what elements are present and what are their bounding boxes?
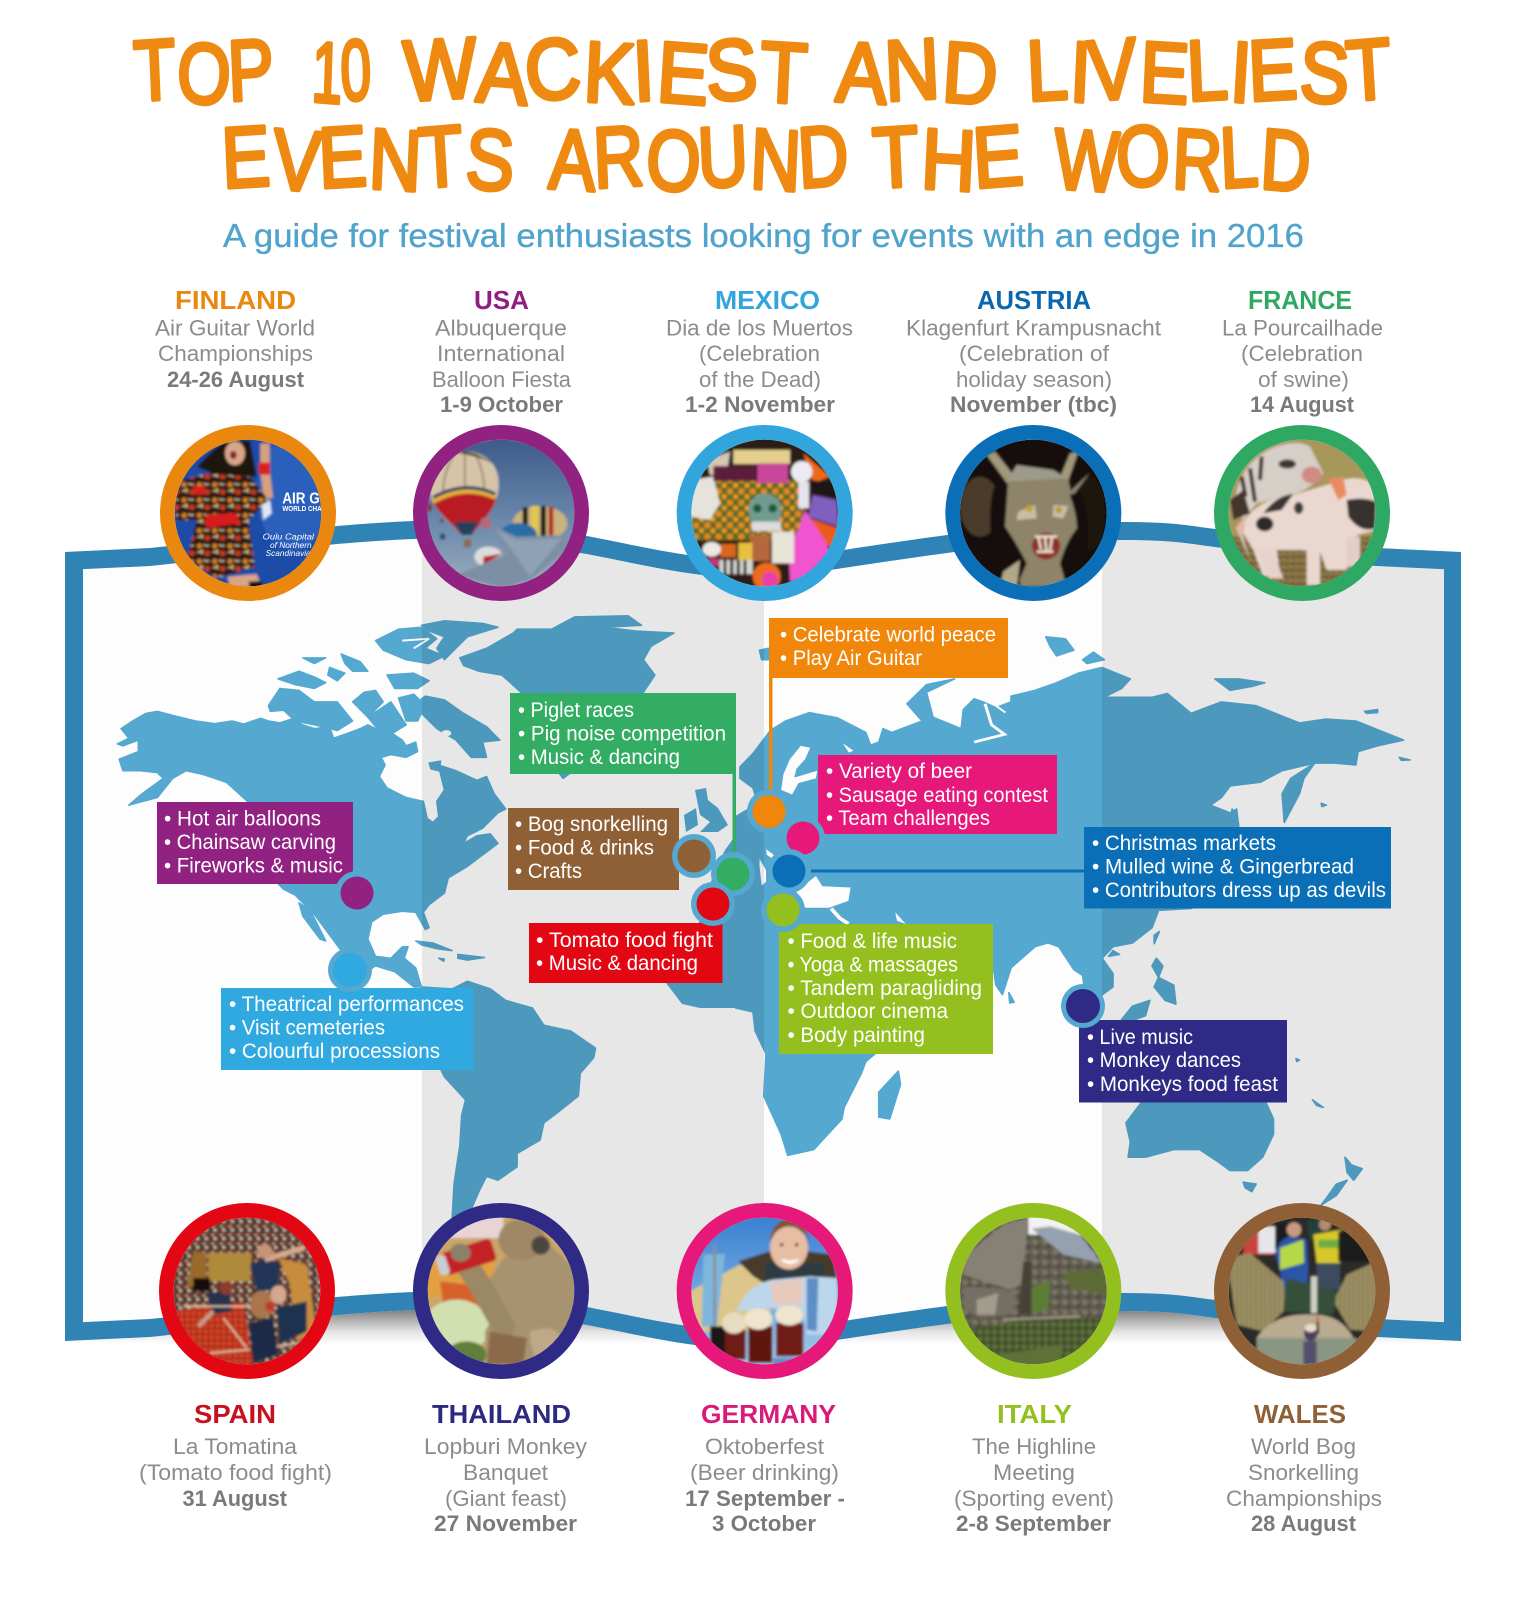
event info: Spain: La Tomatina <box>173 1434 298 1459</box>
event info: Finland <box>155 285 315 392</box>
callout: USA activities: • Chainsaw carving <box>164 831 336 854</box>
event info: Mexico: MEXICO <box>715 285 820 315</box>
callout: Italy activities <box>779 924 993 1054</box>
callout: Italy activities: • Yoga & massages <box>788 954 958 976</box>
event info: Finland: Championships <box>158 341 313 366</box>
event info: Austria: AUSTRIA <box>977 285 1091 315</box>
event info: Thailand: Banquet <box>463 1460 548 1485</box>
photo circle: France piglets <box>1221 432 1383 594</box>
event info: Italy: (Sporting event) <box>954 1486 1114 1511</box>
photo circle: Finland air guitar: WORLD CHA <box>282 504 322 513</box>
photo circle: Mexico altar <box>684 432 845 594</box>
callout: Mexico activities <box>221 988 474 1070</box>
callout: Austria activities <box>805 827 1391 908</box>
map marker: Italy <box>761 888 805 932</box>
event info: Wales: Championships <box>1226 1486 1382 1511</box>
title: WACKIEST <box>401 20 810 124</box>
callout: Italy activities: • Tandem paragliding <box>788 977 982 1000</box>
title: EVENTS <box>219 108 517 210</box>
event info: Austria: (Celebration of <box>959 341 1110 366</box>
event info: Thailand: Lopburi Monkey <box>424 1434 587 1459</box>
photo circle: Finland air guitar <box>167 432 330 594</box>
map marker: France <box>711 852 755 896</box>
photo circle: Austria Krampus mask <box>953 432 1114 594</box>
event info: Germany: GERMANY <box>701 1399 836 1429</box>
event info: USA: USA <box>474 285 529 315</box>
event info: Mexico: (Celebration <box>699 341 820 366</box>
event info: France <box>1222 285 1383 417</box>
grey fold panels <box>422 500 1444 1350</box>
event info: Wales <box>1226 1399 1382 1536</box>
title: TOP <box>131 22 276 124</box>
event info: France: of swine) <box>1258 367 1349 392</box>
map frame: bottom wavy band <box>65 1292 1461 1349</box>
folded map paper <box>116 540 1444 1326</box>
photo circle: Finland air guitar: AIR G <box>282 490 320 507</box>
callout: Italy activities: • Body painting <box>788 1024 925 1047</box>
subtitle: A guide for festival enthusiasts looking for events with an edge in 2016 <box>223 218 1304 255</box>
map frame: top wavy band <box>65 521 1461 578</box>
event info: USA: 1-9 October <box>440 392 563 417</box>
callout: Germany activities: • Team challenges <box>826 807 990 830</box>
photo circle: Wales bog snorkelling <box>1221 1210 1383 1372</box>
event info: Italy: 2-8 September <box>956 1511 1111 1536</box>
event info: Germany: Oktoberfest <box>705 1434 824 1459</box>
event info: Thailand <box>424 1399 587 1536</box>
event info: France: La Pourcailhade <box>1222 316 1383 340</box>
map marker: Mexico <box>328 948 372 992</box>
callout: Thailand activities: • Monkey dances <box>1087 1049 1241 1072</box>
event info: Spain <box>139 1399 332 1511</box>
event info: Spain: (Tomato food fight) <box>139 1460 332 1485</box>
event info: Wales: World Bog <box>1251 1434 1356 1459</box>
map marker: Finland <box>747 790 791 834</box>
event info: Austria: Klagenfurt Krampusnacht <box>906 316 1161 340</box>
event info: Italy <box>954 1399 1114 1536</box>
callout: USA activities: • Fireworks & music <box>164 854 343 878</box>
title: AROUND <box>547 108 851 211</box>
event info: Mexico: Dia de los Muertos <box>666 316 853 340</box>
map frame: right edge <box>1444 552 1461 1340</box>
callout: Finland activities: • Celebrate world peace <box>780 624 996 646</box>
event info: Germany <box>685 1399 845 1536</box>
event info: Austria: November (tbc) <box>950 392 1117 417</box>
event info: USA: Balloon Fiesta <box>432 367 572 392</box>
event info: Germany: 17 September - <box>685 1486 845 1511</box>
map marker: USA <box>335 871 379 915</box>
callout: Mexico activities: • Theatrical performances <box>229 993 464 1016</box>
map frame: left edge <box>65 552 83 1340</box>
callout: USA activities <box>157 802 353 884</box>
event info: Wales: Snorkelling <box>1248 1460 1359 1485</box>
callout: Spain activities: • Tomato food fight <box>536 929 713 952</box>
event info: Thailand: 27 November <box>434 1511 577 1536</box>
callout: Germany activities: • Variety of beer <box>826 760 972 783</box>
event info: Germany: 3 October <box>712 1511 816 1536</box>
event info: Finland: FINLAND <box>175 285 296 315</box>
callout: France activities: • Piglet races <box>518 699 634 722</box>
event info: Mexico: of the Dead) <box>699 367 821 392</box>
title: AND <box>834 21 1001 124</box>
event info: Austria: holiday season) <box>956 367 1112 392</box>
map marker: Thailand <box>1061 984 1105 1028</box>
event info: Mexico: 1-2 November <box>685 392 835 417</box>
map marker: Austria <box>767 849 811 893</box>
callout: Spain activities: • Music & dancing <box>536 952 698 975</box>
callout: France activities: • Pig noise competition <box>518 722 726 746</box>
callout: Germany activities <box>818 755 1057 834</box>
callout: Thailand activities: • Monkeys food feast <box>1087 1073 1278 1096</box>
callout: Wales activities: • Crafts <box>515 860 582 883</box>
photo circle: Spain tomato fight <box>166 1210 328 1372</box>
event info: France: (Celebration <box>1241 341 1363 366</box>
map frame: bottom shadow <box>65 1310 1461 1352</box>
callout: Mexico activities: • Colourful processions <box>229 1040 440 1063</box>
title: LIVELIEST <box>1024 21 1394 123</box>
photo circle: Germany Oktoberfest <box>684 1210 845 1372</box>
event info: USA: Albuquerque <box>435 316 567 340</box>
callout: Finland activities: • Play Air Guitar <box>780 647 922 670</box>
photo circle: Finland air guitar: Scandinavia <box>266 548 311 558</box>
title: WORLD <box>1052 107 1314 210</box>
photo circle: Finland air guitar: Oulu Capital <box>263 531 315 541</box>
callout: Wales activities: • Bog snorkelling <box>515 813 668 836</box>
event info: Wales: WALES <box>1254 1399 1346 1429</box>
event info: Italy: The Highline <box>972 1434 1096 1459</box>
callout: Thailand activities <box>1079 1020 1287 1102</box>
callout: USA activities: • Hot air balloons <box>164 808 321 830</box>
photo circle: Finland air guitar: of Northern <box>270 540 312 550</box>
callout: Germany activities: • Sausage eating contest <box>826 784 1048 807</box>
event info: Thailand: (Giant feast) <box>445 1486 567 1511</box>
callout: Mexico activities: • Visit cemeteries <box>229 1016 385 1040</box>
title <box>131 20 1394 211</box>
event info: France: 14 August <box>1250 392 1355 417</box>
photo circle: Thailand monkey <box>420 1210 582 1372</box>
map marker: Germany <box>781 816 825 860</box>
event info: Italy: Meeting <box>993 1460 1075 1485</box>
callout: Austria activities: • Mulled wine & Gingerbread <box>1092 856 1354 878</box>
event info: USA: International <box>437 341 565 366</box>
event info: Mexico <box>666 285 853 417</box>
title: THE <box>870 108 1026 210</box>
callout: France activities: • Music & dancing <box>518 746 680 769</box>
event info: Thailand: THAILAND <box>432 1399 571 1429</box>
callout: Wales activities <box>508 808 679 890</box>
callout: Italy activities: • Outdoor cinema <box>788 1000 948 1023</box>
map marker: Wales <box>672 834 716 878</box>
event info: Finland: 24-26 August <box>167 367 305 392</box>
world map <box>117 616 1410 1218</box>
event info: Finland: Air Guitar World <box>155 316 315 340</box>
event info: USA <box>432 285 572 417</box>
callout: France activities <box>510 693 736 864</box>
map marker: Spain <box>691 882 735 926</box>
callout: Wales activities: • Food & drinks <box>515 836 654 860</box>
callout: Italy activities: • Food & life music <box>788 930 957 953</box>
event info: France: FRANCE <box>1248 285 1352 315</box>
callout: Austria activities: • Contributors dress up as devils <box>1092 879 1386 902</box>
title: 10 <box>310 23 373 122</box>
event info: Wales: 28 August <box>1251 1511 1357 1536</box>
event info: Spain: SPAIN <box>194 1399 276 1429</box>
callout: Finland activities <box>769 618 1008 803</box>
event info: Germany: (Beer drinking) <box>690 1460 839 1485</box>
photo circle: Italy Highline <box>953 1210 1114 1372</box>
callout: Thailand activities: • Live music <box>1087 1026 1193 1049</box>
event info: Italy: ITALY <box>997 1399 1072 1429</box>
callout: Austria activities: • Christmas markets <box>1092 832 1276 855</box>
photo circle: USA balloons <box>420 432 582 594</box>
event info: Spain: 31 August <box>182 1486 288 1511</box>
event info: Austria <box>906 285 1161 417</box>
callout: Spain activities <box>529 923 722 983</box>
